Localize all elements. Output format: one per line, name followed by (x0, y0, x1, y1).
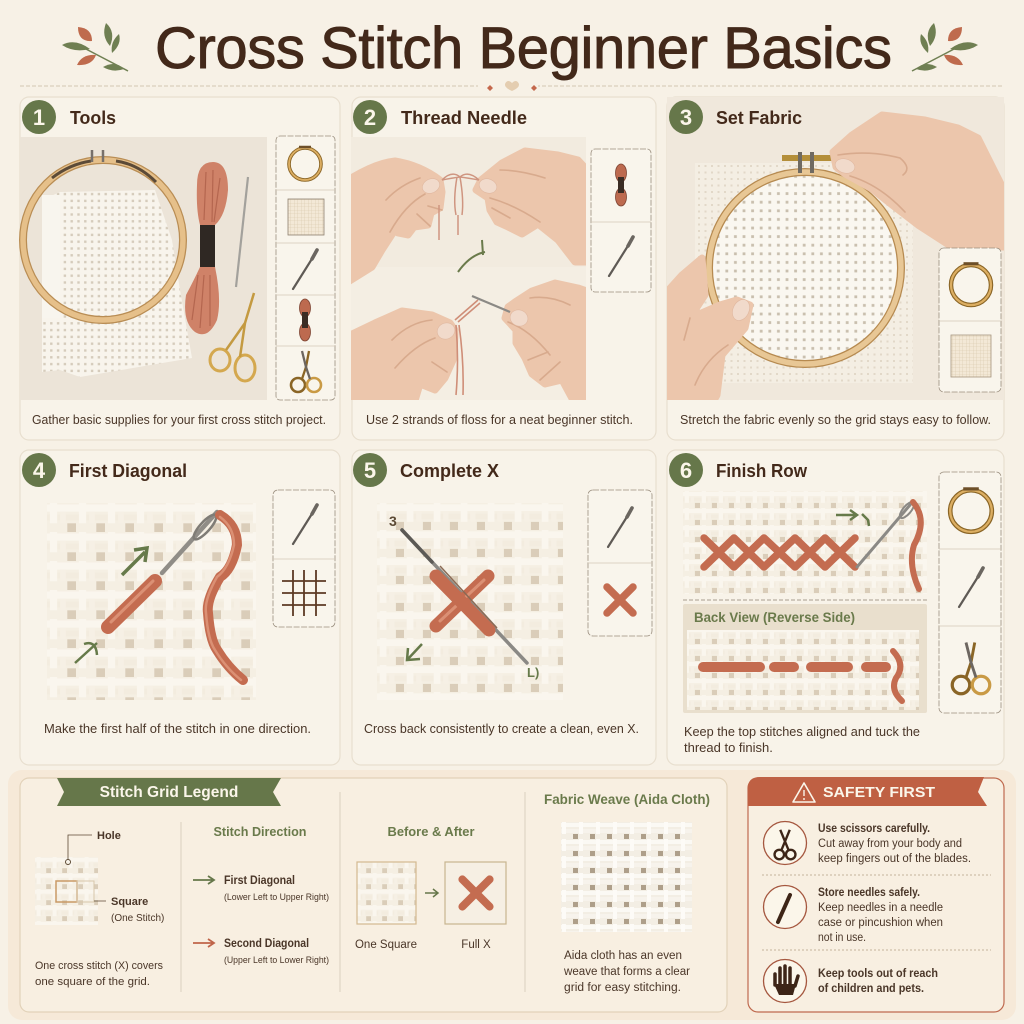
number badge 1: 1 (33, 105, 45, 130)
safety tip: scissors: Cut away from your body and (818, 838, 962, 850)
first diagonal illustration (47, 503, 256, 700)
tool icons column (276, 136, 335, 400)
number badge 1 (22, 100, 56, 134)
panel: stitch grid legend (20, 778, 727, 1012)
icon: left sprig (62, 23, 128, 71)
fabric weave column: weave that forms a clear (563, 966, 690, 978)
number badge 3 (669, 100, 703, 134)
legend note: One cross stitch (X) covers (35, 960, 163, 972)
safety tip: children (764, 960, 938, 1002)
caption: Use 2 strands of floss for a neat beginner stitch. (366, 412, 633, 427)
caption: Stretch the fabric evenly so the grid stays easy to follow. (680, 412, 991, 427)
hands (348, 151, 590, 404)
number badge 6 (669, 453, 703, 487)
number badge 4: 4 (33, 458, 46, 483)
legend note: one square of the grid. (35, 976, 150, 988)
panel: step 5 complete x (352, 450, 656, 765)
complete x illustration: 3 (389, 513, 397, 529)
number badge 6: 6 (680, 458, 692, 483)
fabric weave column: grid for easy stitching. (564, 982, 681, 994)
number badge 2: 2 (364, 105, 376, 130)
caption: thread to finish. (684, 740, 773, 755)
back view illustration (683, 600, 927, 713)
safety tip: children: Keep tools out of reach (818, 968, 938, 980)
before and after column (355, 825, 506, 951)
safety tip: children: of children and pets. (818, 983, 924, 995)
caption: Make the first half of the stitch in one direction. (44, 721, 311, 736)
tool icons column (273, 490, 335, 627)
panel: safety first (748, 777, 1004, 1012)
number badge 5 (353, 453, 387, 487)
panel: step 1 tools (20, 97, 340, 440)
heading: first diagonal: First Diagonal (69, 461, 187, 481)
legend note (35, 960, 163, 988)
front row illustration (683, 491, 927, 594)
stitch direction column: (Lower Left to Upper Right) (224, 892, 329, 902)
panel: step 6 finish row (667, 450, 1004, 765)
before and after column: Full X (461, 939, 491, 951)
caption: Cross back consistently to create a clean, even X. (364, 721, 639, 736)
icon: right sprig (912, 23, 978, 71)
grid diagram: Square (111, 896, 148, 908)
number badge 2 (353, 100, 387, 134)
heading: complete x: Complete X (400, 461, 499, 481)
panel: step 4 first diagonal (20, 450, 340, 765)
title: Cross Stitch Beginner Basics (155, 16, 892, 81)
set fabric photo (664, 97, 1008, 404)
caption: Keep the top stitches aligned and tuck the (684, 724, 920, 739)
heading: tools: Tools (70, 108, 116, 128)
safety tip: needles: case or pincushion when (818, 917, 943, 929)
fabric weave column: Aida cloth has an even (564, 950, 682, 962)
heading: finish row: Finish Row (716, 461, 808, 481)
safety tip: needles: not in use. (818, 932, 866, 944)
tool icons column (588, 490, 652, 636)
grid diagram: (One Stitch) (111, 913, 164, 924)
grid diagram (35, 830, 164, 925)
safety tip: needles (764, 886, 943, 944)
fabric weave column (544, 792, 710, 994)
panel: step 3 set fabric (664, 97, 1008, 440)
bottom band (8, 770, 1016, 1020)
legend banner: Stitch Grid Legend (100, 784, 238, 801)
tool icons column (939, 248, 1001, 392)
number badge 3: 3 (680, 105, 692, 130)
complete x illustration: L) (527, 665, 539, 680)
safety tip: scissors: keep fingers out of the blades. (818, 853, 971, 865)
number badge 5: 5 (364, 458, 376, 483)
heading: set fabric: Set Fabric (716, 108, 802, 128)
tool icons column (591, 149, 651, 292)
safety banner: SAFETY FIRST (823, 784, 935, 801)
tools photo (20, 137, 267, 400)
stitch direction column: (Upper Left to Lower Right) (224, 955, 329, 965)
before and after column: Before & After (388, 825, 475, 839)
safety tip: scissors: Use scissors carefully. (818, 823, 930, 835)
title divider with heart (20, 79, 1004, 94)
threading photo (348, 137, 590, 404)
safety tip: scissors (764, 822, 971, 865)
tool icons column (939, 472, 1001, 713)
stitch direction column: Stitch Direction (214, 825, 306, 839)
grid diagram: Hole (97, 830, 121, 842)
safety banner (748, 777, 987, 806)
safety tip: needles: Store needles safely. (818, 887, 920, 899)
number badge 4 (22, 453, 56, 487)
stitch direction column: Second Diagonal (224, 938, 309, 950)
panel: step 2 thread needle (348, 97, 656, 440)
before and after column: One Square (355, 939, 417, 951)
safety tip: needles: Keep needles in a needle (818, 902, 943, 914)
heading: thread needle: Thread Needle (401, 108, 527, 128)
stitch direction column (193, 825, 329, 965)
back view label: Back View (Reverse Side) (694, 610, 855, 625)
complete x illustration (377, 503, 563, 700)
stitch direction column: First Diagonal (224, 875, 295, 887)
legend banner (57, 778, 281, 806)
caption (684, 724, 920, 755)
fabric weave column: Fabric Weave (Aida Cloth) (544, 792, 710, 807)
caption: Gather basic supplies for your first cross stitch project. (32, 412, 326, 427)
